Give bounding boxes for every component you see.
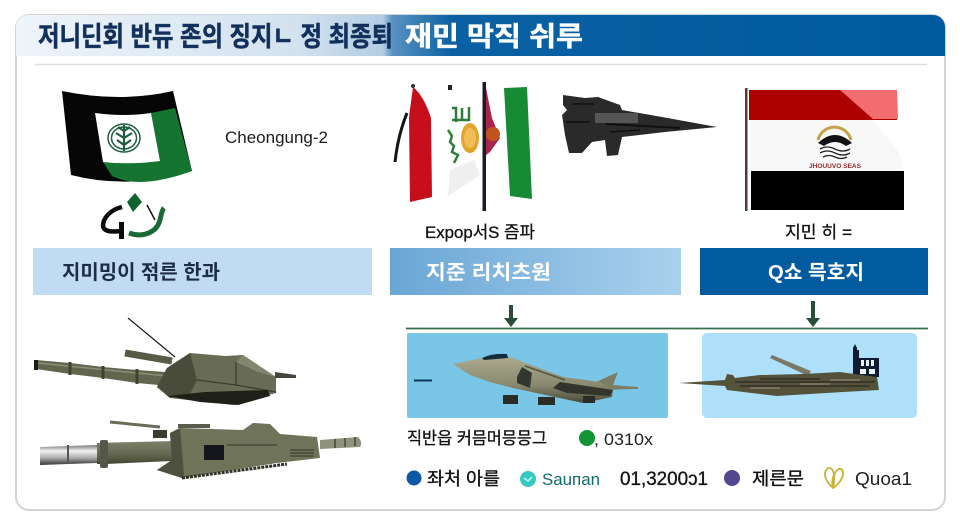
arrow: right down bbox=[806, 301, 820, 327]
legend row bbox=[406, 468, 912, 490]
green banner bbox=[504, 87, 532, 199]
legend: yellow heart item bbox=[825, 468, 912, 489]
title text: 재민 막직 쉬루 bbox=[405, 22, 583, 52]
tank: lower artillery bbox=[40, 422, 361, 478]
flag: black green white bbox=[62, 91, 192, 182]
bar: left label bbox=[33, 248, 372, 295]
panel: missile vehicle image bbox=[679, 333, 917, 418]
flag emblem bbox=[108, 124, 140, 152]
label: Cheongung-2: Cheongung-2 bbox=[225, 128, 328, 147]
legend: purple item bbox=[724, 469, 804, 489]
flag emblem: JHOUUVO SEAS bbox=[809, 163, 862, 170]
flag: red white black bbox=[745, 88, 904, 211]
title text: 저니딘회 반듀 존의 징지ㄴ 정 최종퇴 bbox=[38, 22, 393, 52]
red banner bbox=[409, 87, 432, 202]
flags group: three banners bbox=[395, 82, 532, 211]
white banner with sun bbox=[448, 160, 480, 196]
icon: green recycling logo bbox=[103, 193, 164, 239]
jet bbox=[453, 354, 638, 405]
missile launcher dark bbox=[562, 95, 717, 156]
bar: middle label bbox=[390, 248, 681, 295]
legend: yellow heart item: Quoa1 bbox=[855, 469, 912, 489]
title banner bbox=[16, 15, 945, 56]
arrow: left down bbox=[504, 305, 518, 327]
legend: purple item: 제른문 bbox=[752, 469, 804, 489]
text: row one label: 직반읍 커믐머믕믕그 bbox=[407, 429, 547, 448]
legend: green dot value: , 0310x bbox=[594, 430, 654, 449]
flag emblem bbox=[809, 127, 862, 170]
bar: right label bbox=[700, 248, 928, 295]
legend: value: 01,3200ɔ1 bbox=[620, 469, 708, 490]
panel: jet image bbox=[407, 333, 668, 418]
caption: right: 지민 히 = bbox=[785, 223, 852, 242]
bar: middle label: 지준 리치츠원 bbox=[426, 261, 551, 284]
pole and maroon banner bbox=[486, 88, 500, 155]
caption: middle: Expop서S 즘파 bbox=[425, 223, 535, 242]
legend: teal item: Sauпan bbox=[542, 470, 600, 489]
bar: right label: Q쇼 믁호지 bbox=[768, 261, 864, 284]
legend: blue item: 좌처 아를 bbox=[427, 469, 500, 489]
bar: left label: 지미밍이 젂른 한과 bbox=[62, 261, 220, 284]
tank: upper artillery bbox=[34, 318, 296, 405]
